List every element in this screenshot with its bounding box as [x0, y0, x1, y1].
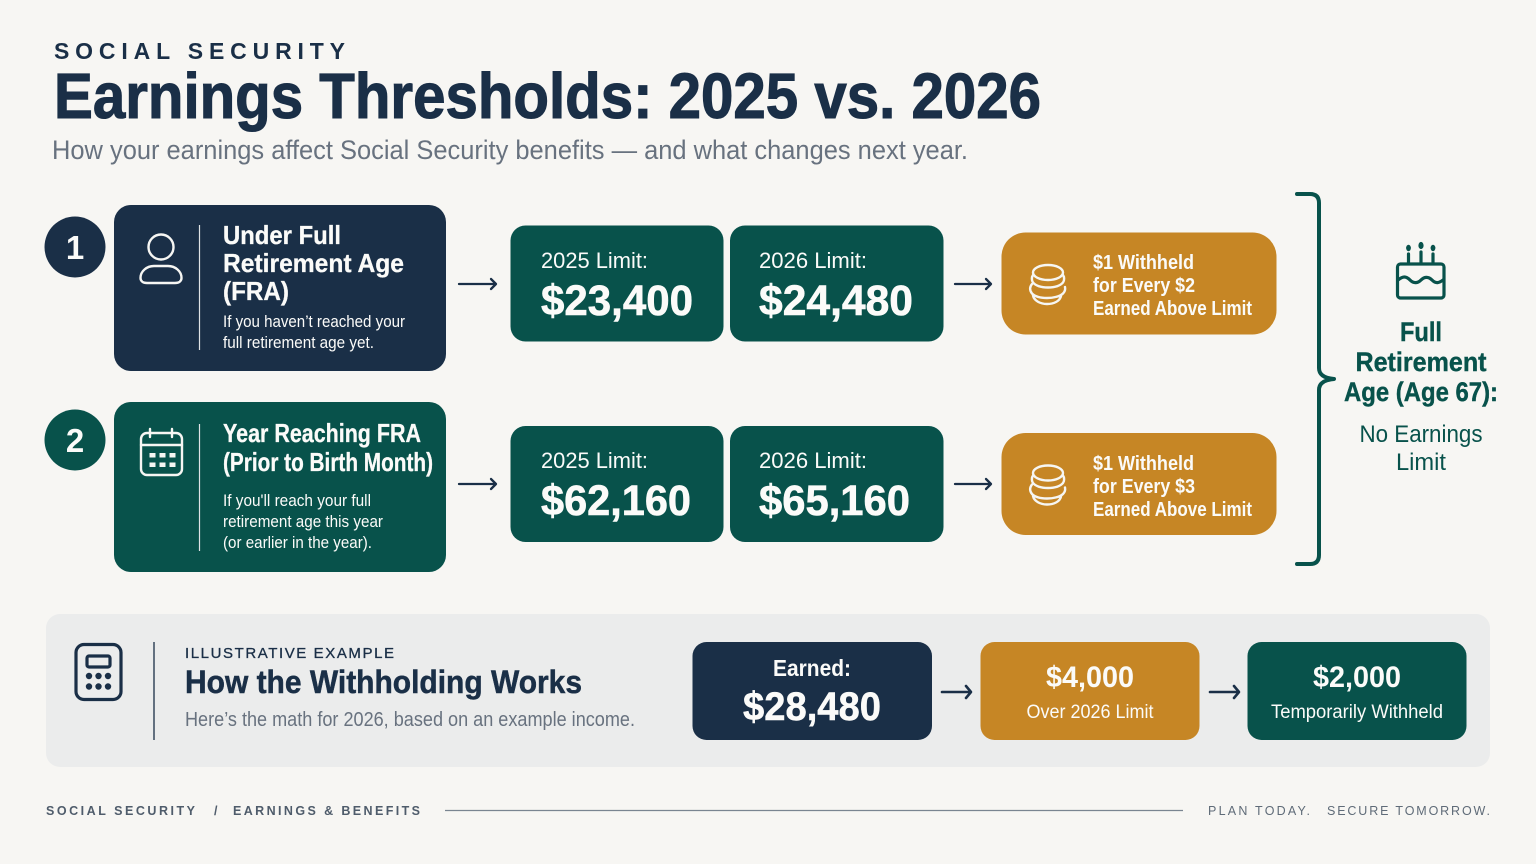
limit card: 2025 row 1 [510, 226, 724, 342]
icon: coins [1030, 265, 1065, 304]
description: year reaching FRA [223, 491, 383, 552]
arrow [942, 686, 971, 698]
callout: full retirement age: Age (Age 67): [1344, 377, 1498, 407]
description: under full retirement age: If you haven’t reached your [223, 312, 405, 331]
panel: under full retirement age [114, 205, 446, 371]
limit card: 2025 row 2: 2025 Limit: [541, 448, 648, 473]
card: temporarily withheld: $2,000 [1313, 661, 1401, 694]
rule card: $1 for every $3: for Every $3 [1093, 476, 1195, 498]
panel: illustrative example [46, 614, 1490, 767]
card: temporarily withheld [1248, 642, 1466, 740]
eyebrow: social security: SOCIAL SECURITY [54, 38, 345, 64]
icon: calendar [141, 429, 182, 475]
callout: full retirement age: Full [1400, 317, 1442, 347]
heading: how the withholding works: How the Withholding Works [185, 664, 582, 700]
card: earned: $28,480 [743, 685, 881, 729]
description: year reaching FRA: (or earlier in the year). [223, 533, 372, 552]
label: illustrative example: ILLUSTRATIVE EXAMPLE [185, 645, 394, 662]
limit card: 2026 row 2: 2026 Limit: [759, 448, 867, 473]
limit card: 2025 row 2: $62,160 [541, 477, 691, 525]
footer: left label: SOCIAL SECURITY [46, 804, 196, 818]
card: temporarily withheld: Temporarily Withheld [1271, 702, 1443, 723]
footer: tagline: SECURE TOMORROW. [1327, 804, 1490, 818]
rule card: $1 for every $3 [1002, 433, 1276, 535]
panel: year reaching FRA [114, 402, 446, 572]
footer: tagline [1208, 804, 1490, 818]
footer: tagline: PLAN TODAY. [1208, 804, 1310, 818]
limit card: 2026 row 2 [730, 426, 944, 542]
card: earned [692, 642, 932, 740]
subtitle: How your earnings affect Social Security benefits — and what changes next year. [52, 135, 968, 165]
limit card: 2025 row 2 [510, 426, 724, 542]
limit card: 2026 row 1: 2026 Limit: [759, 248, 867, 273]
title: Earnings Thresholds: 2025 vs. 2026 [54, 60, 1041, 132]
rule card: $1 for every $3: $1 Withheld [1093, 453, 1194, 475]
heading: year reaching FRA: (Prior to Birth Month) [223, 447, 433, 477]
rule card: $1 for every $3: Earned Above Limit [1093, 499, 1252, 521]
icon: person [140, 234, 182, 283]
limit card: 2026 row 1: $24,480 [759, 277, 913, 325]
limit card: 2025 row 1: $23,400 [541, 277, 693, 325]
icon: calculator [76, 644, 121, 700]
footer: left label: EARNINGS & BENEFITS [233, 804, 420, 818]
heading: under full retirement age: (FRA) [223, 276, 289, 306]
heading: under full retirement age: Retirement Age [223, 248, 404, 278]
limit card: 2026 row 1 [730, 226, 944, 342]
heading: under full retirement age: Under Full [223, 220, 341, 250]
callout: no earnings limit: Limit [1396, 449, 1446, 476]
number badge 2: 2 [66, 422, 84, 459]
arrow [955, 479, 991, 489]
callout: no earnings limit: No Earnings [1360, 421, 1482, 448]
rule card: $1 for every $2 [1002, 232, 1276, 334]
arrow [459, 479, 496, 489]
heading: year reaching FRA [223, 418, 433, 477]
rule card: $1 for every $2: $1 Withheld [1093, 252, 1194, 274]
card: over limit: $4,000 [1046, 661, 1134, 694]
number badge 1: 1 [66, 229, 84, 266]
callout: no earnings limit [1360, 421, 1482, 476]
footer: left label [46, 804, 420, 818]
footer: left label: / [214, 804, 218, 818]
rule card: $1 for every $2: Earned Above Limit [1093, 298, 1252, 320]
limit card: 2025 row 1: 2025 Limit: [541, 248, 648, 273]
arrow [1210, 686, 1239, 698]
number badge 2 [44, 410, 106, 470]
description: under full retirement age [223, 312, 405, 352]
number badge 1 [44, 216, 106, 278]
arrow [955, 279, 991, 289]
limit card: 2026 row 2: $65,160 [759, 477, 910, 525]
icon: birthday cake [1398, 242, 1444, 298]
callout: full retirement age: Retirement [1356, 347, 1486, 377]
description: year reaching FRA: If you'll reach your full [223, 491, 371, 510]
heading: year reaching FRA: Year Reaching FRA [223, 418, 421, 448]
card: over limit: Over 2026 Limit [1026, 702, 1154, 723]
card: over limit [980, 642, 1200, 740]
rule card: $1 for every $2: for Every $2 [1093, 275, 1195, 297]
callout: full retirement age [1344, 317, 1498, 407]
description: year reaching FRA: retirement age this year [223, 512, 383, 531]
arrow [459, 279, 496, 289]
description: under full retirement age: full retirement age yet. [223, 333, 374, 352]
bracket [1297, 194, 1334, 564]
description: Here’s the math for 2026, based on an example income. [185, 709, 635, 731]
icon: coins [1030, 466, 1065, 504]
heading: under full retirement age [223, 220, 404, 306]
card: earned: Earned: [773, 655, 851, 681]
